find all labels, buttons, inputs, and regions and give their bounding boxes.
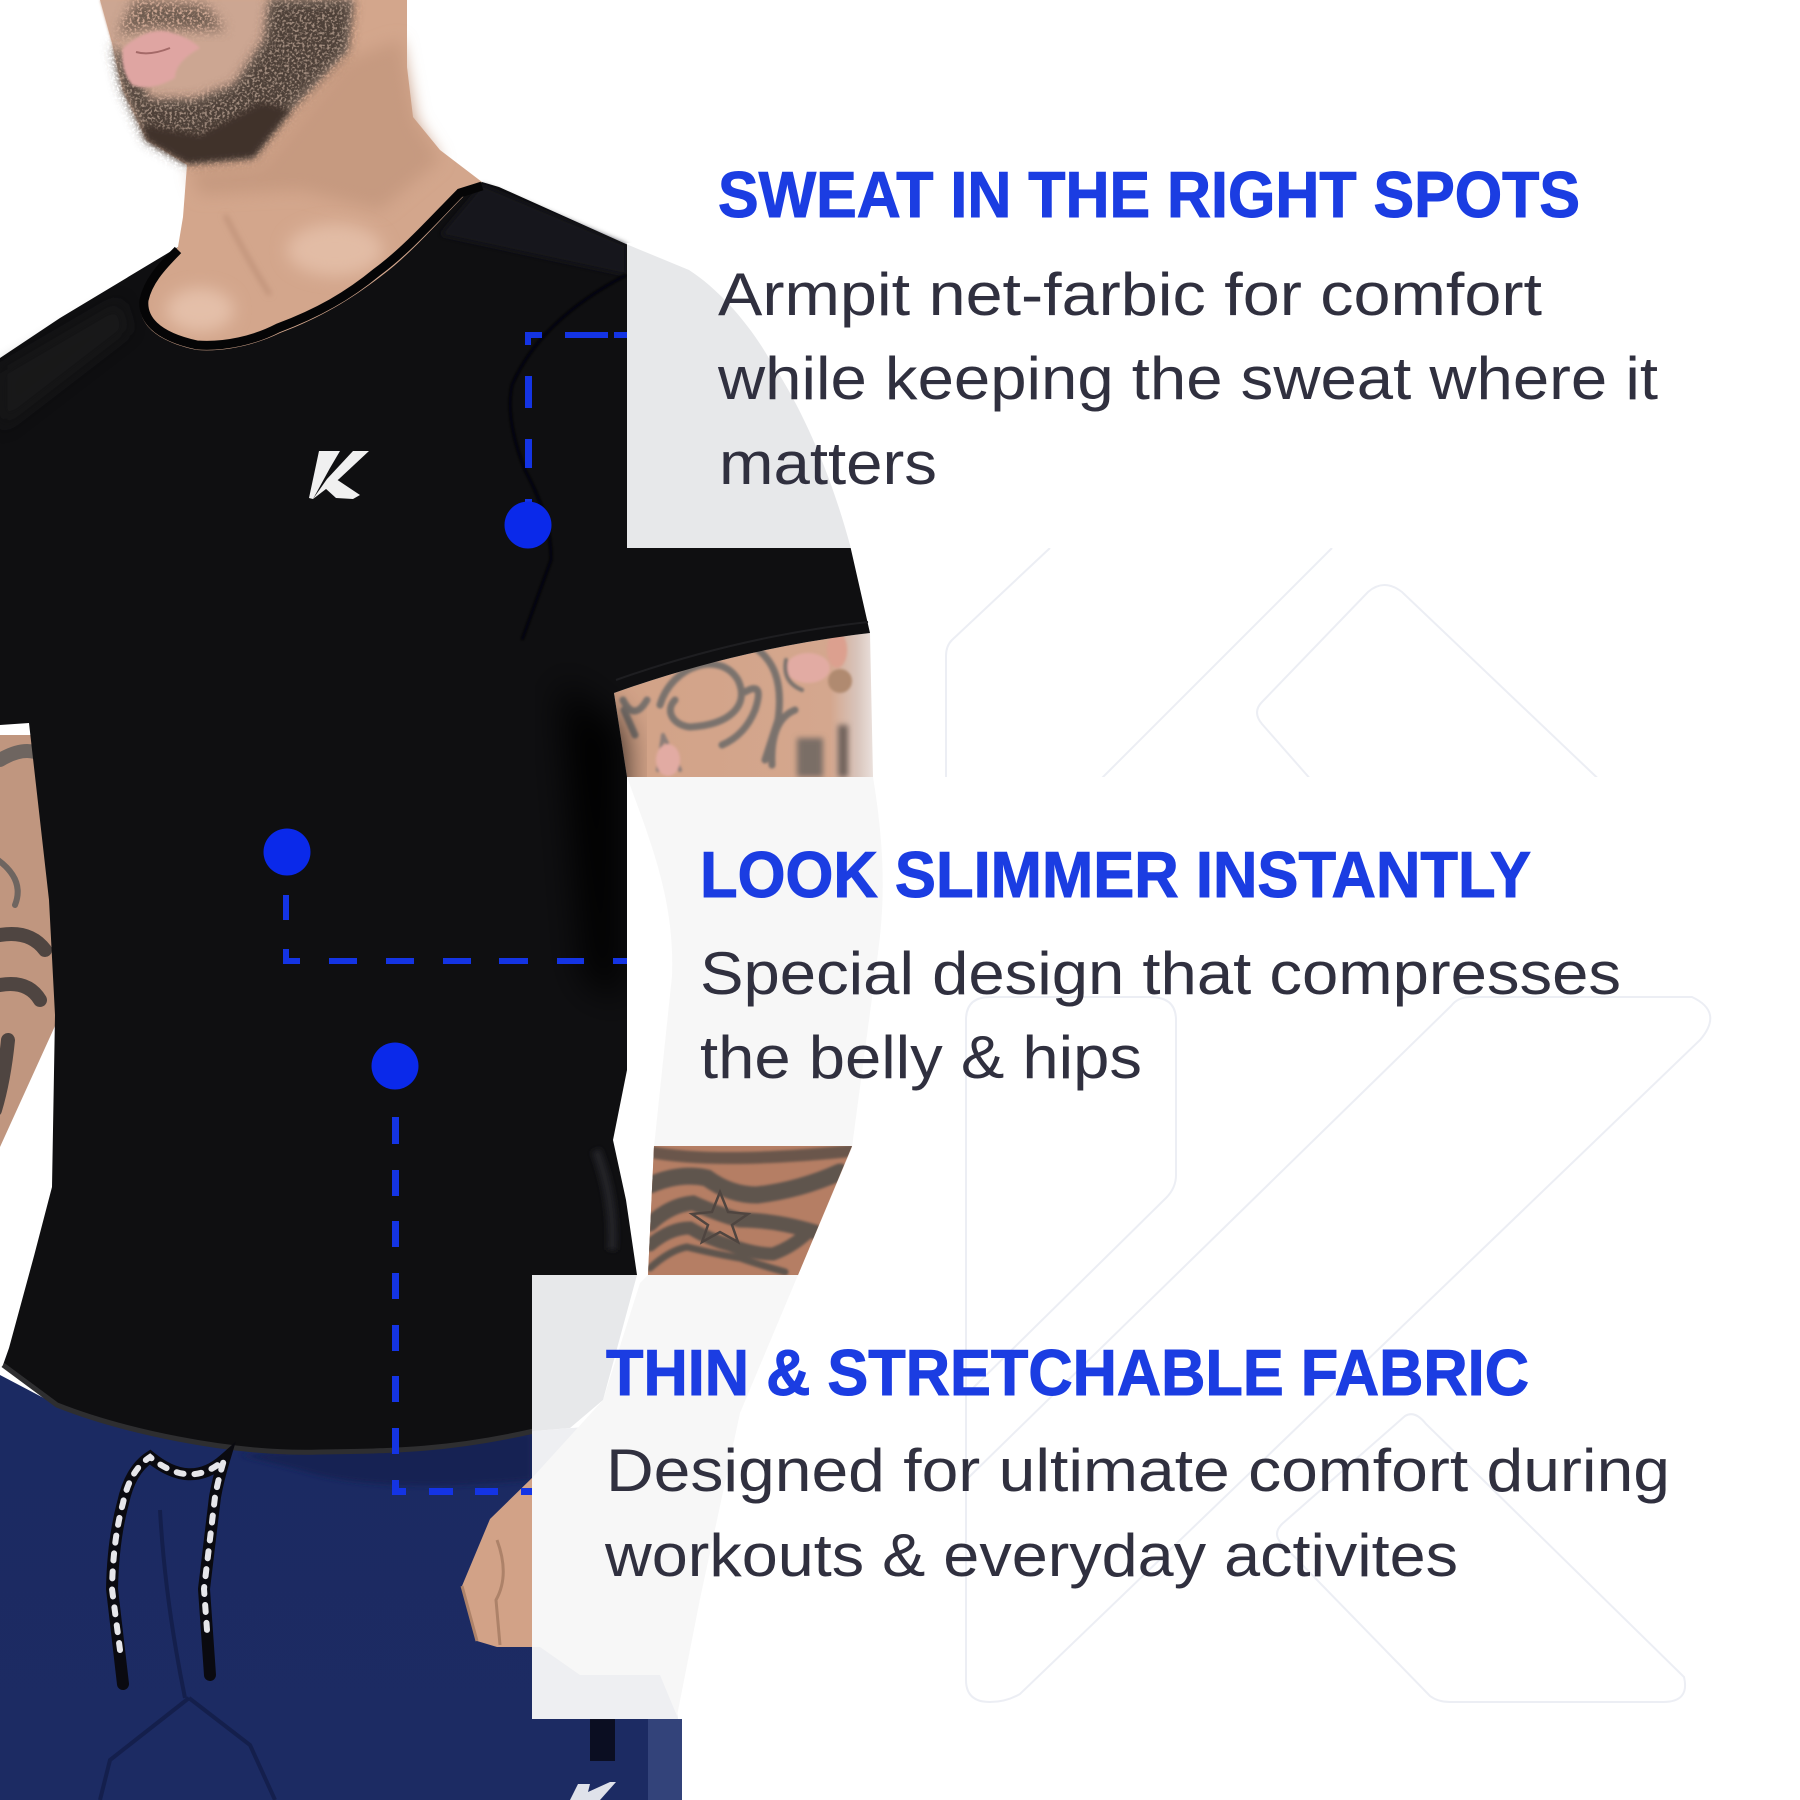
- collarbone highlight right: [287, 224, 383, 276]
- sleeve hem: [616, 622, 868, 680]
- connector: waist to fabric panel: [392, 1117, 532, 1495]
- beard base tone: [112, 0, 353, 163]
- body line 2: the belly & hips: [700, 1024, 1142, 1091]
- body line 1: Special design that compresses: [700, 940, 1621, 1007]
- text block: sweat: [717, 158, 1658, 497]
- shirt side shadow: [560, 680, 622, 1000]
- body line 2: workouts & everyday activites: [604, 1522, 1458, 1589]
- marker dot: waist: [372, 1042, 418, 1090]
- collarbone highlights: [166, 288, 234, 332]
- ghosted photo inside panels: [532, 244, 850, 1719]
- beard stubble: [112, 0, 353, 163]
- face and neck skin: [100, 0, 482, 360]
- left arm: [0, 735, 60, 1147]
- shirt armpit seam: [510, 275, 626, 640]
- upper arm tattoos: [623, 632, 852, 776]
- shirt collar band: [144, 186, 482, 345]
- panel: slimmer: [627, 777, 1800, 1146]
- upper watermark logo outlines: [946, 548, 1610, 790]
- photo: man wearing black shirt: [0, 0, 883, 1800]
- left arm tattoos: [0, 751, 45, 1110]
- arm dark tattoo patch right: [838, 725, 848, 777]
- lips: [122, 31, 200, 87]
- shirt: [0, 182, 870, 1452]
- body line 2: while keeping the sweat where it: [717, 345, 1658, 412]
- lower watermark logo outlines: [966, 997, 1710, 1702]
- hand shading: [462, 1540, 503, 1645]
- heading: SWEAT IN THE RIGHT SPOTS: [718, 158, 1580, 231]
- panel: sweat: [627, 243, 1800, 548]
- body line 3: matters: [719, 430, 937, 497]
- shirt side folds: [596, 1150, 612, 1250]
- shorts lighter side: [648, 1719, 682, 1800]
- heading: LOOK SLIMMER INSTANTLY: [700, 838, 1531, 911]
- marker dot: belly: [264, 828, 310, 876]
- arm and hand: [462, 633, 883, 1716]
- waistband shading: [240, 1432, 532, 1486]
- heading: THIN & STRETCHABLE FABRIC: [606, 1336, 1529, 1409]
- shorts pocket zip: [590, 1719, 615, 1761]
- body line 1: Armpit net-farbic for comfort: [718, 261, 1542, 328]
- chin beard dark: [142, 102, 290, 163]
- arm dark tattoo patch: [797, 738, 823, 777]
- body line 1: Designed for ultimate comfort during: [606, 1437, 1670, 1504]
- forearm tattoo panel: [640, 1146, 860, 1276]
- shirt hem: [3, 1365, 534, 1452]
- connector: armpit to sweat panel: [525, 332, 627, 507]
- drawstring: [112, 1457, 224, 1684]
- shirt shoulder highlight: [0, 300, 130, 430]
- shorts folds: [100, 1510, 275, 1800]
- marker dot: armpit: [504, 502, 552, 548]
- neck shadow under jaw: [190, 40, 440, 210]
- shirt logo: [309, 451, 369, 499]
- upper shoulder panel tone: [440, 185, 626, 275]
- cheek skin: [100, 0, 353, 163]
- shorts logo: [570, 1782, 616, 1800]
- connector: belly to slimmer panel: [283, 895, 627, 964]
- shorts: [0, 1375, 682, 1800]
- neck crease: [225, 215, 270, 295]
- moustache: [118, 0, 225, 35]
- text block: fabric: [604, 1336, 1670, 1589]
- lip line: [136, 48, 170, 53]
- text block: slimmer: [700, 838, 1621, 1091]
- panel: fabric: [532, 1275, 1800, 1719]
